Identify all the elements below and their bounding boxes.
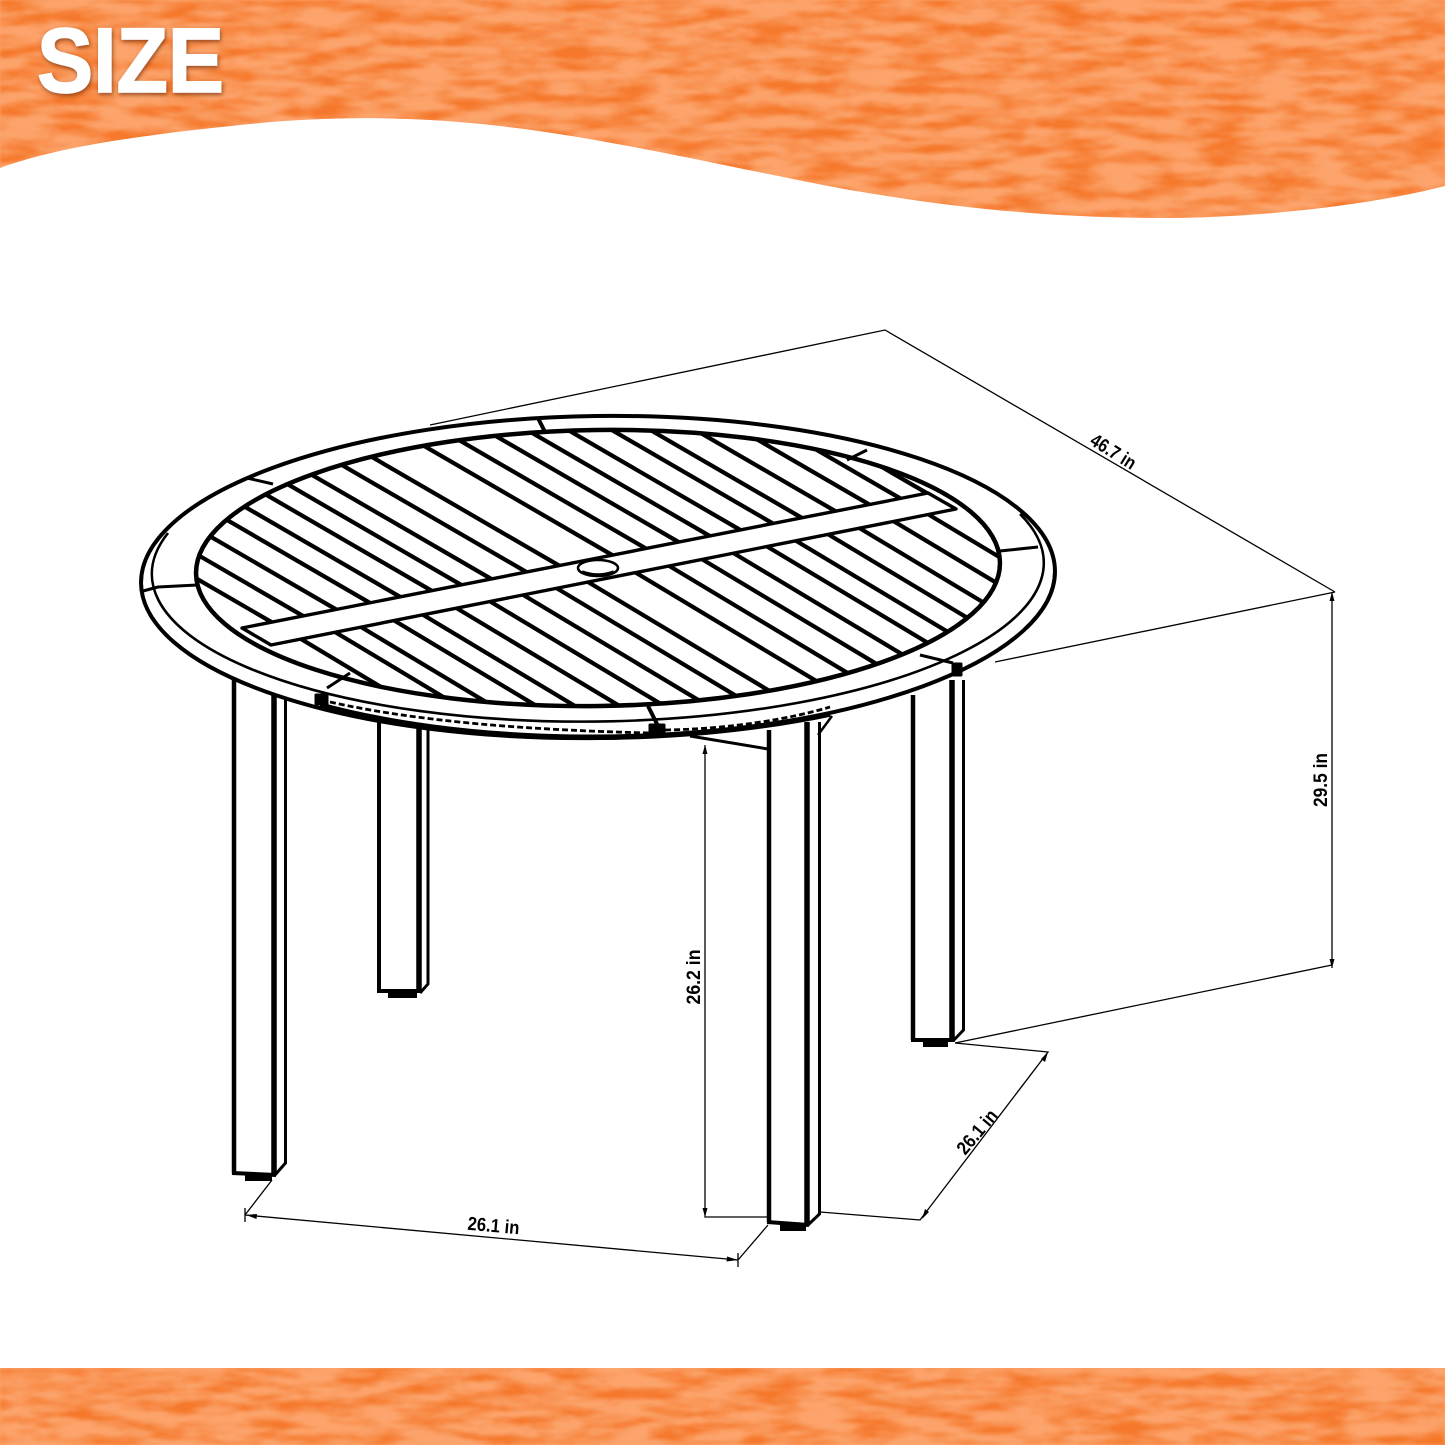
- label: 46.7 in: 46.7 in: [1086, 430, 1140, 474]
- table drawing: [139, 414, 1057, 1231]
- cross bar: [242, 493, 956, 645]
- umbrella hole: [578, 560, 618, 576]
- slats: [198, 432, 998, 704]
- height dimension line: [1331, 592, 1333, 968]
- leg span bottom line: [245, 1180, 768, 1267]
- table apron under top: [690, 716, 832, 749]
- clearance dimension line: [705, 745, 768, 1217]
- arrowheads: [246, 592, 1334, 1262]
- upper extension line: [995, 592, 1335, 662]
- front left leg: [232, 680, 286, 1181]
- title: SIZE: SIZE: [37, 10, 224, 112]
- slat panel outline: [194, 424, 1002, 712]
- bottom orange wood band: [0, 1368, 1445, 1445]
- rim upper surface edge: [152, 514, 1044, 722]
- label: 29.5 in: 29.5 in: [1311, 753, 1332, 807]
- label: 26.1 in width: 26.1 in: [467, 1214, 520, 1239]
- leg span right line: [820, 1043, 1048, 1220]
- round table top: [139, 414, 1057, 740]
- heavy bottom edge: [320, 705, 830, 737]
- front right leg: [767, 722, 820, 1231]
- back left leg: [377, 720, 428, 998]
- lower extension line: [955, 965, 1332, 1043]
- top orange wood banner: [0, 0, 1445, 218]
- label: 26.1 in depth: 26.1 in: [953, 1106, 1003, 1159]
- back right leg: [911, 680, 964, 1047]
- outer rim silhouette: [139, 410, 1057, 744]
- rim segment joints: [143, 418, 1038, 733]
- underside dashed edge: [330, 702, 830, 733]
- dimension lines: [245, 330, 1335, 1267]
- top width lines: [430, 330, 1335, 592]
- label: 26.2 in: 26.2 in: [684, 950, 705, 1004]
